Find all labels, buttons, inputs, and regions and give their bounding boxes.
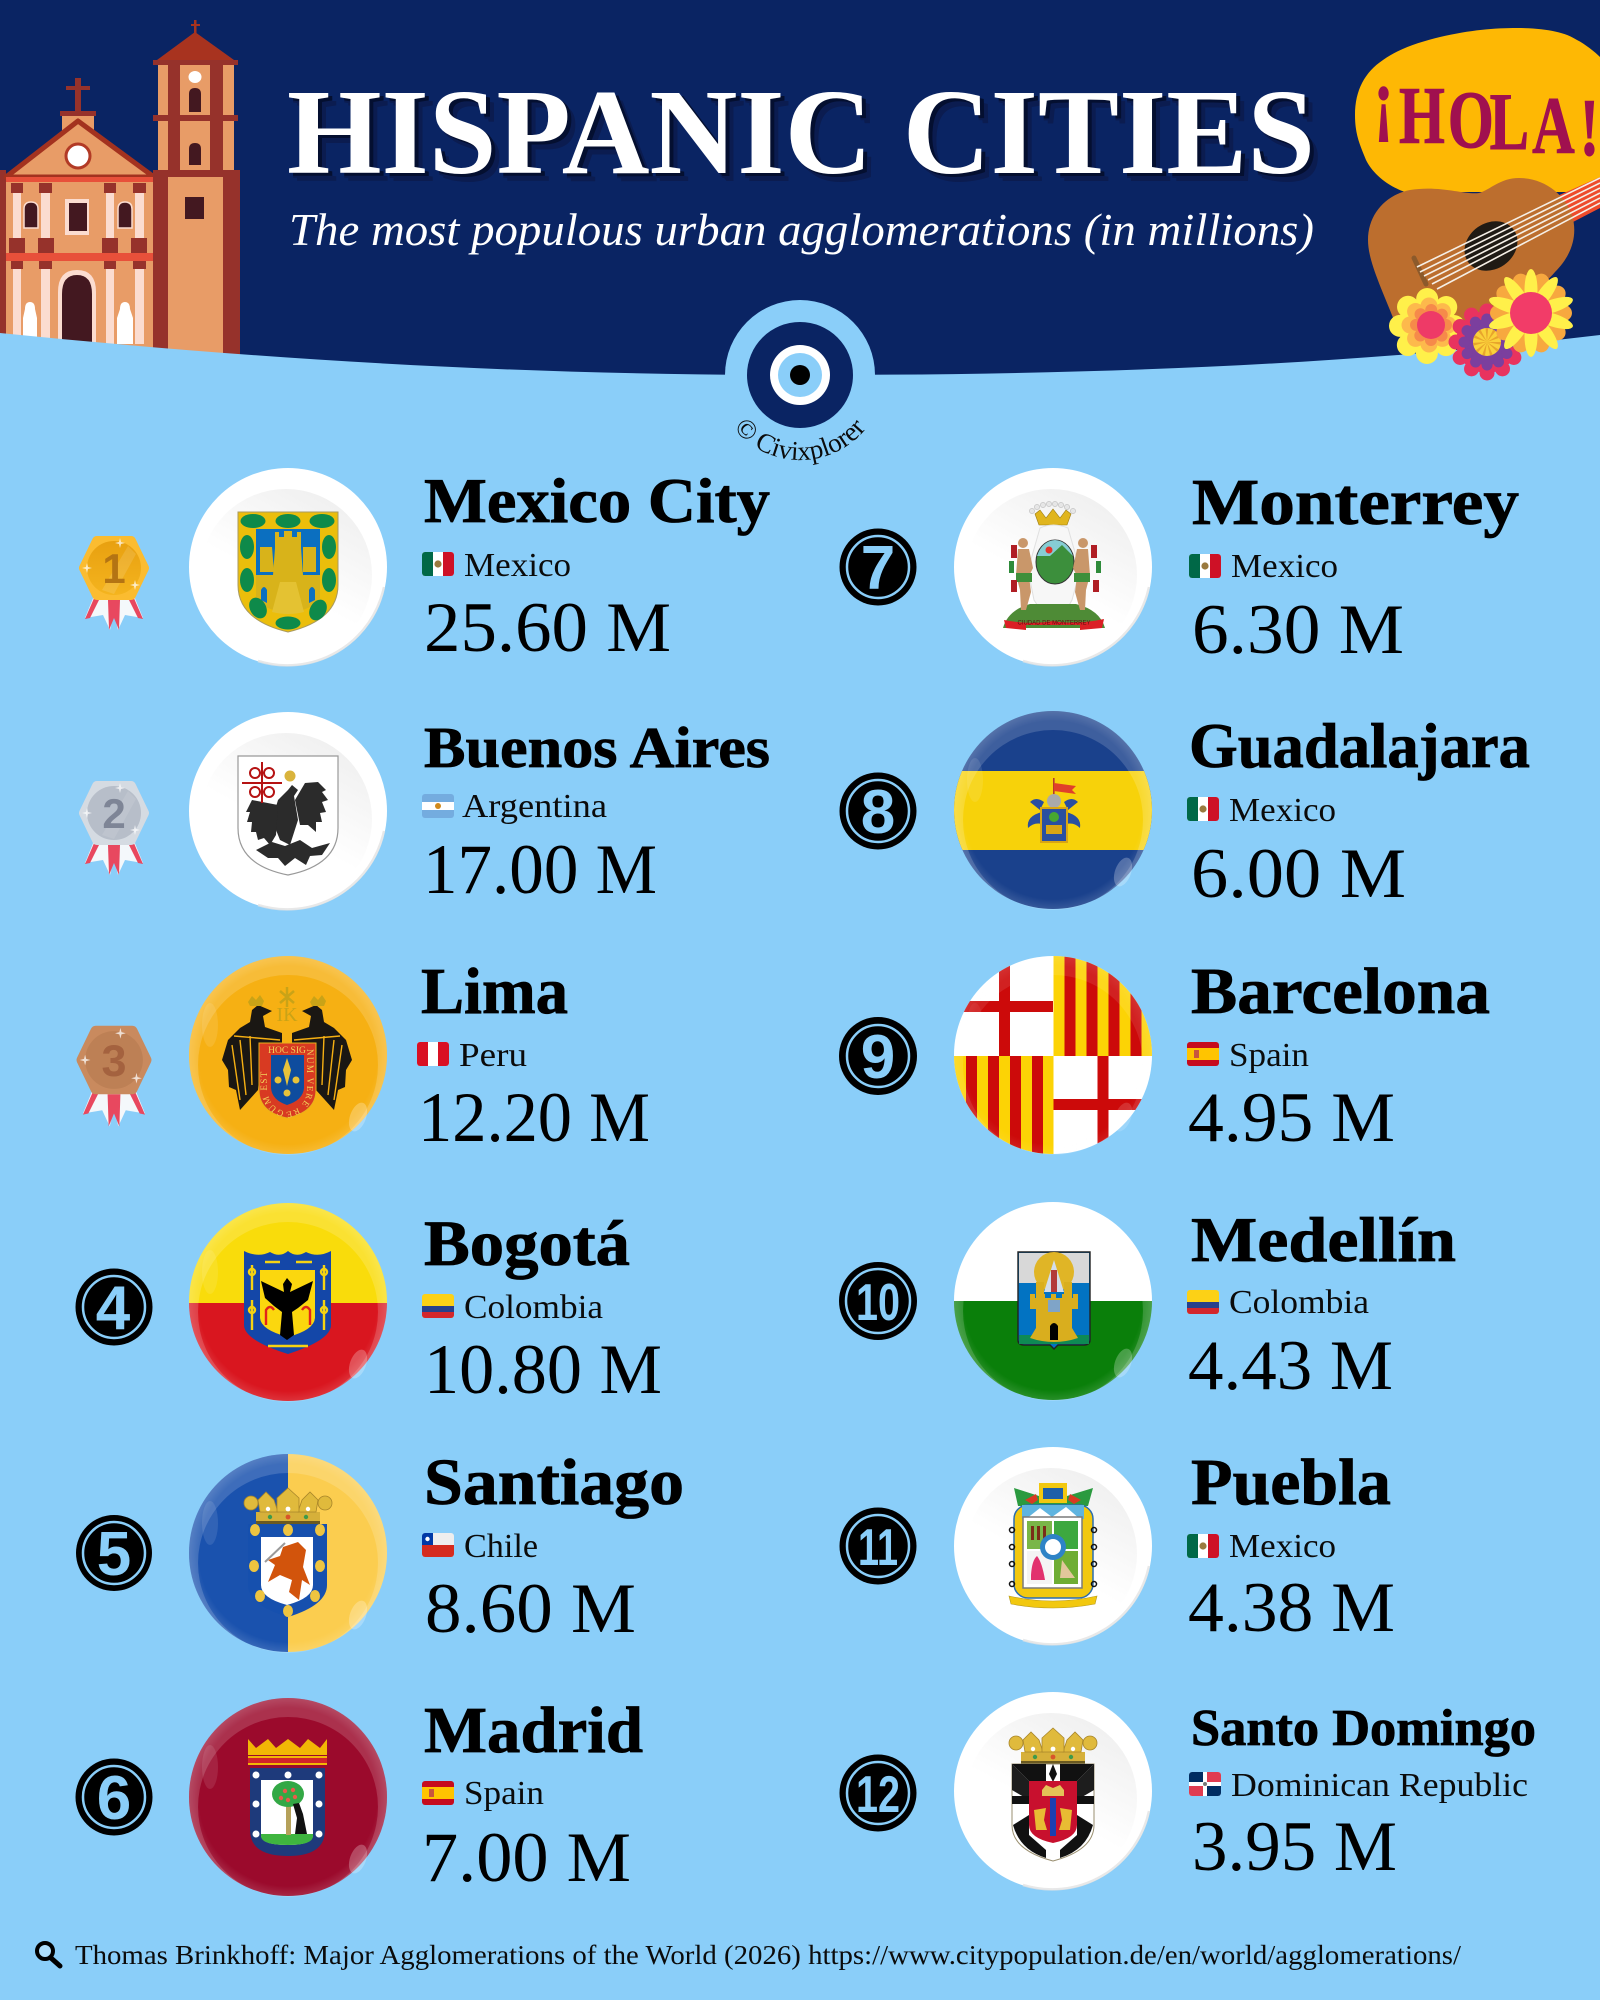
country: Mexico (1231, 548, 1338, 585)
flag: Mexico (1187, 797, 1219, 821)
flag: Spain (422, 1781, 454, 1805)
flag: Mexico (422, 552, 454, 576)
city name: Madrid (424, 1694, 643, 1767)
speech bubble: ¡HOLA!: ¡HOLA! (1374, 53, 1599, 173)
country: Argentina (462, 788, 607, 825)
city name: Bogotá (424, 1208, 630, 1280)
crest initials: IK (276, 1004, 298, 1026)
flag: Peru (417, 1042, 449, 1066)
disc: Mexico City arms (189, 468, 387, 666)
flag: Mexico (1189, 554, 1221, 578)
icon: evil eye logo (725, 300, 875, 450)
entry 6: Madrid (76, 1694, 643, 1897)
disc: Medellín arms (954, 1202, 1152, 1400)
population: 17.00 M (423, 831, 657, 909)
city name: Santiago (424, 1446, 684, 1519)
entry 8: Guadalajara (840, 710, 1530, 913)
speech bubble: ¡HOLA! (1355, 28, 1600, 192)
gold medal rank 1: 1 (102, 545, 126, 592)
disc: Lima arms (189, 956, 387, 1154)
disc: Bogotá arms (189, 1203, 387, 1403)
header band (0, 0, 1600, 400)
flag: Argentina (422, 794, 454, 818)
rank 9 (839, 1017, 917, 1095)
population: 10.80 M (424, 1331, 662, 1409)
country: Chile (464, 1528, 538, 1565)
country: Dominican Republic (1231, 1767, 1528, 1804)
population: 6.30 M (1192, 591, 1404, 669)
rank 5: 5 (97, 1520, 131, 1589)
motto: CIUDAD DE MONTERREY (1017, 620, 1091, 626)
rank 9: 9 (861, 1023, 895, 1092)
rank 7 (840, 528, 916, 606)
country: Colombia (464, 1289, 603, 1326)
city name: Barcelona (1191, 955, 1490, 1028)
city name: Monterrey (1192, 466, 1519, 539)
entry 4: Bogotá (76, 1203, 662, 1409)
disc: Puebla arms (954, 1447, 1152, 1645)
city name: Puebla (1191, 1446, 1391, 1519)
gold medal rank 1 (82, 538, 144, 630)
disc: Barcelona flag (954, 956, 1152, 1156)
city name: Lima (421, 955, 568, 1028)
country: Mexico (1229, 792, 1336, 829)
population: 3.95 M (1192, 1808, 1397, 1886)
icon: magnifier (37, 1943, 60, 1966)
entry 10: Medellín (839, 1202, 1456, 1405)
rank 11: 11 (858, 1519, 898, 1577)
shield motto rim: NUM VERE REGUM EST (260, 1049, 314, 1118)
silver medal rank 2 (82, 783, 144, 875)
rank 4 (76, 1268, 152, 1346)
country: Colombia (1229, 1284, 1369, 1321)
source footer: Thomas Brinkhoff: Major Agglomerations of the World (2026) https://www.citypopulation.de/en/world/agglomerations/ (75, 1940, 1462, 1970)
flag: Spain (1187, 1042, 1219, 1066)
entry 9: Barcelona (839, 955, 1490, 1157)
rank 6 (76, 1758, 152, 1836)
gloss overlays on discs (189, 711, 1152, 1897)
illustration: guitar (1368, 177, 1600, 340)
country: Mexico (464, 547, 571, 584)
icon: sunflower (1487, 269, 1575, 357)
illustration: church (0, 20, 240, 367)
icon: purple flower (1456, 311, 1518, 373)
flag: Dominican Republic (1189, 1772, 1221, 1796)
flag: Colombia (422, 1294, 454, 1318)
disc: Buenos Aires arms (189, 712, 387, 910)
population: 6.00 M (1191, 835, 1406, 913)
population: 7.00 M (422, 1819, 631, 1897)
country: Peru (459, 1037, 527, 1074)
disc: Santo Domingo arms (954, 1692, 1152, 1890)
rank 6: 6 (97, 1764, 131, 1833)
entry 5: Santiago (76, 1446, 684, 1652)
flag: Chile (422, 1533, 454, 1557)
title: HISPANIC CITIES (287, 65, 1315, 200)
entry 11: Puebla (840, 1446, 1395, 1647)
city name: Guadalajara (1189, 710, 1530, 781)
silver medal rank 2: 2 (102, 790, 126, 837)
rank 7: 7 (861, 534, 895, 603)
population: 4.95 M (1188, 1079, 1395, 1157)
entry 3: Lima (76, 955, 650, 1157)
disc: Madrid arms (189, 1698, 387, 1896)
entry 7: Monterrey (840, 466, 1519, 669)
rank 10 (839, 1262, 917, 1340)
city name: Buenos Aires (424, 715, 770, 780)
rank 8 (840, 772, 916, 850)
country: Spain (464, 1775, 544, 1812)
city name: Mexico City (424, 465, 770, 536)
rank 12: 12 (856, 1766, 900, 1824)
city name: Santo Domingo (1191, 1700, 1536, 1757)
entry 1: Mexico City (82, 465, 770, 667)
disc: Santiago arms (189, 1454, 387, 1652)
disc: Monterrey arms (954, 468, 1152, 666)
country: Spain (1229, 1037, 1309, 1074)
population: 4.38 M (1188, 1569, 1395, 1647)
flag: Colombia (1187, 1290, 1219, 1314)
subtitle: The most populous urban agglomerations (in millions) (289, 205, 1314, 255)
rank 10: 10 (856, 1274, 900, 1332)
rank 8: 8 (861, 778, 895, 847)
rank 11 (840, 1508, 916, 1584)
disc: Guadalajara arms (954, 711, 1152, 909)
country: Mexico (1229, 1528, 1336, 1565)
credit: Civixplorer: © Civixplorer (738, 420, 865, 465)
icon: yellow flower (1400, 299, 1454, 353)
bronze medal rank 3 (80, 1028, 146, 1126)
bronze medal rank 3: 3 (102, 1035, 126, 1086)
city name: Medellín (1191, 1204, 1456, 1275)
population: 4.43 M (1188, 1327, 1393, 1405)
rank 4: 4 (96, 1274, 131, 1343)
population: 8.60 M (425, 1570, 636, 1648)
entry 12: Santo Domingo (840, 1692, 1536, 1890)
shield motto top: HOC SIG (268, 1046, 306, 1056)
population: 12.20 M (418, 1079, 650, 1157)
flag: Mexico (1187, 1534, 1219, 1558)
population: 25.60 M (424, 589, 671, 667)
rank 12 (840, 1754, 916, 1832)
entry 2: Buenos Aires (82, 712, 770, 910)
rank 5 (76, 1515, 152, 1591)
